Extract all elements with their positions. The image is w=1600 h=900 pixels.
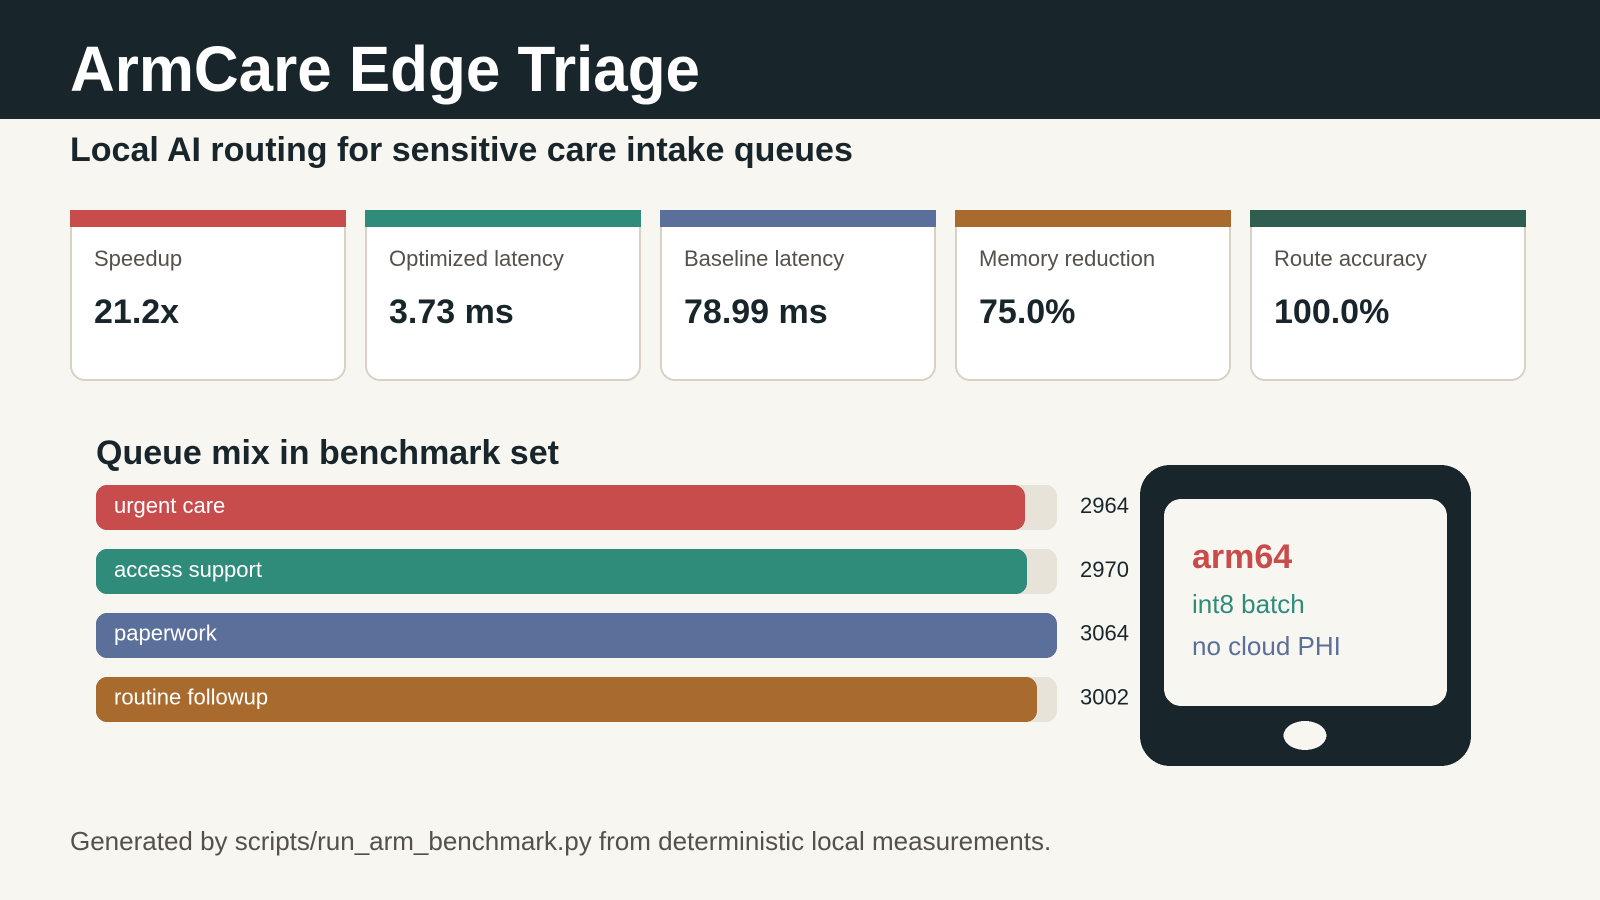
card: baseline latency: Baseline latency [684,246,844,271]
title: ArmCare Edge Triage [70,33,700,105]
card: speedup [70,210,346,380]
bar: urgent care: urgent care [114,493,225,518]
card: optimized latency [365,210,641,380]
device screen text [1192,538,1341,661]
card: memory reduction: 75.0% [979,293,1075,331]
bar: access support [96,549,1129,594]
header band with title [0,0,1600,119]
bar: routine followup: 3002 [1080,684,1129,710]
bar chart: queue mix [96,485,1129,722]
device screen text: no cloud PHI [1192,631,1341,661]
bar: urgent care [96,485,1129,530]
footer note: Generated by scripts/run_arm_benchmark.py from deterministic local measurements. [70,826,1051,856]
bar: urgent care: 2964 [1080,493,1129,518]
KPI cards row [70,210,1526,380]
card: optimized latency: Optimized latency [389,246,564,271]
card: memory reduction [955,210,1231,380]
bar: access support: access support [114,557,262,582]
bar: paperwork [96,613,1129,658]
bar: access support: 2970 [1080,557,1129,582]
bar: paperwork: paperwork [114,620,218,646]
card: baseline latency [660,210,936,380]
device screen text: arm64 [1192,538,1292,576]
icon: tablet device [1140,465,1471,766]
subtitle: Local AI routing for sensitive care intake queues [70,131,853,169]
card: speedup: Speedup [94,246,182,271]
bar: routine followup: routine followup [114,684,268,710]
card: baseline latency: 78.99 ms [684,293,828,331]
card: route accuracy: 100.0% [1274,293,1389,331]
bar: routine followup [96,677,1129,722]
card: optimized latency: 3.73 ms [389,293,514,331]
card: route accuracy [1250,210,1526,380]
card: speedup: 21.2x [94,293,179,331]
device screen text: int8 batch [1192,589,1305,619]
card: route accuracy: Route accuracy [1274,246,1427,271]
card: memory reduction: Memory reduction [979,246,1155,271]
bar: paperwork: 3064 [1080,620,1129,646]
chart heading: Queue mix in benchmark set [96,434,559,472]
